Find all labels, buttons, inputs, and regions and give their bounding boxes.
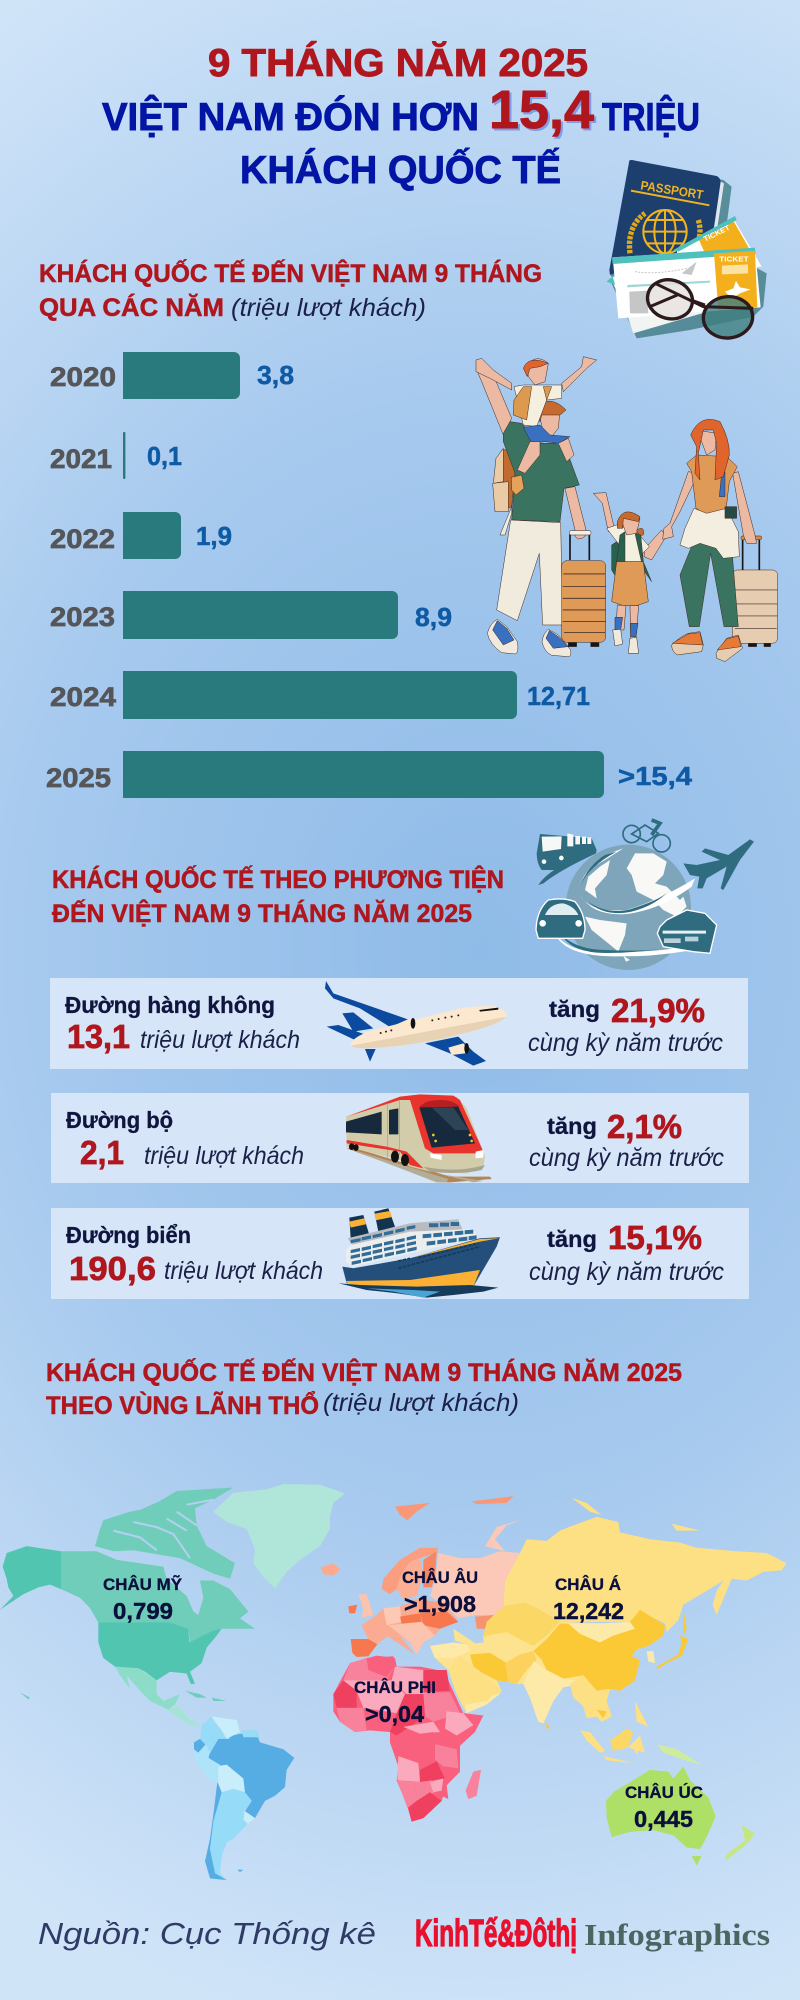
map: Americas xyxy=(0,1484,345,1880)
icon: passport, tickets and glasses xyxy=(607,160,767,340)
bar 2024: 12,71 xyxy=(527,681,590,711)
mother xyxy=(663,419,778,662)
heading: visitors by region xyxy=(46,1357,682,1420)
North America xyxy=(0,1484,345,1725)
heading: visitors by region: KHÁCH QUỐC TẾ ĐẾN VIỆT NAM 9 THÁNG NĂM 2025 xyxy=(46,1357,682,1387)
bar 2020: 2020 xyxy=(50,362,116,392)
panel: road: tăng xyxy=(547,1113,597,1139)
illustration: travelling family xyxy=(476,357,778,662)
title: 15,4 xyxy=(489,80,594,140)
panel: sea: 15,1% xyxy=(608,1219,702,1256)
icon: passport, tickets and glasses: TICKET xyxy=(719,255,749,264)
girl xyxy=(593,493,666,653)
logo: Infographics xyxy=(584,1917,770,1952)
heading: visitors by year xyxy=(39,258,542,322)
Europe xyxy=(321,1496,522,1657)
Asia xyxy=(430,1498,787,1763)
label: Europe: >1,908 xyxy=(404,1591,476,1617)
icon: cruise ship xyxy=(338,1208,500,1298)
label: Africa: >0,04 xyxy=(365,1701,424,1727)
bar 2024: 2024 xyxy=(50,682,116,712)
South America xyxy=(194,1717,294,1880)
icon: airplane xyxy=(325,981,507,1066)
panel: road: Đường bộ xyxy=(66,1107,173,1133)
world map xyxy=(0,1484,787,1880)
heading: visitors by region: THEO VÙNG LÃNH THỔ xyxy=(46,1390,319,1420)
label: Asia: CHÂU Á xyxy=(555,1575,621,1594)
plane xyxy=(683,839,754,890)
logo: KinhTế&Đôthị xyxy=(415,1913,577,1955)
bar 2020: 3,8 xyxy=(257,360,294,390)
panel: air: tăng xyxy=(549,996,600,1022)
label: Africa xyxy=(354,1678,436,1727)
panel: sea: tăng xyxy=(547,1226,597,1252)
bar 2025 xyxy=(46,751,693,798)
panel: air: 21,9% xyxy=(611,992,705,1029)
icon: train xyxy=(346,1094,492,1182)
bar 2025: 2025 xyxy=(46,763,111,793)
panel: road: cùng kỳ năm trước xyxy=(529,1144,724,1172)
label: Europe xyxy=(402,1568,478,1617)
heading: visitors by region: (triệu lượt khách) xyxy=(323,1389,519,1417)
bar 2020 xyxy=(50,352,294,399)
panel: air: cùng kỳ năm trước xyxy=(528,1029,723,1057)
label: Americas: 0,799 xyxy=(113,1598,173,1624)
panel: sea: cùng kỳ năm trước xyxy=(529,1258,724,1286)
heading: visitors by transport xyxy=(52,864,504,928)
bar 2022 xyxy=(50,512,232,559)
title: KHÁCH QUỐC TẾ xyxy=(240,147,561,192)
panel: road: triệu lượt khách xyxy=(144,1142,304,1170)
label: Americas: CHÂU MỸ xyxy=(103,1574,183,1594)
label: Oceania: 0,445 xyxy=(634,1806,693,1832)
label: Oceania xyxy=(625,1783,703,1832)
panel: sea xyxy=(51,1208,749,1299)
bar 2023: 8,9 xyxy=(415,602,452,632)
father's orange suitcase xyxy=(562,531,606,647)
father xyxy=(476,359,586,657)
bar 2023: 2023 xyxy=(50,602,115,632)
map: Europe, Africa, Asia, Oceania xyxy=(321,1496,787,1866)
icon: passport, tickets and glasses: PASSPORT xyxy=(640,178,705,202)
panel: sea: Đường biển xyxy=(66,1222,191,1248)
train xyxy=(537,833,597,885)
bar 2021: 2021 xyxy=(50,444,112,474)
child on shoulders xyxy=(476,357,597,495)
bicycle xyxy=(623,820,670,852)
car xyxy=(536,899,585,938)
title: 9 THÁNG NĂM 2025 xyxy=(208,41,588,85)
panel: air: 13,1 xyxy=(67,1018,130,1055)
icon: globe with transport modes xyxy=(536,820,754,970)
label: Oceania: CHÂU ÚC xyxy=(625,1783,703,1802)
Oceania xyxy=(606,1744,755,1866)
panel: air xyxy=(50,978,748,1069)
ship xyxy=(657,910,717,953)
label: Africa: CHÂU PHI xyxy=(354,1678,436,1697)
heading: visitors by transport: ĐẾN VIỆT NAM 9 THÁNG NĂM 2025 xyxy=(52,898,472,928)
title: TRIỆU xyxy=(602,95,700,139)
heading: visitors by year: KHÁCH QUỐC TẾ ĐẾN VIỆT NAM 9 THÁNG xyxy=(39,258,542,288)
panel: air: triệu lượt khách xyxy=(140,1026,300,1054)
title: 15,4 xyxy=(491,82,596,142)
label: Asia: 12,242 xyxy=(553,1598,624,1624)
panel: sea: 190,6 xyxy=(69,1250,156,1287)
bar 2022: 1,9 xyxy=(196,521,232,551)
bar 2023 xyxy=(50,591,452,639)
title: VIỆT NAM ĐÓN HƠN xyxy=(102,95,479,139)
label: Europe: CHÂU ÂU xyxy=(402,1568,478,1587)
title xyxy=(102,41,700,192)
label: Americas xyxy=(103,1574,183,1624)
bar chart: visitors by year xyxy=(46,352,693,798)
panel: sea: triệu lượt khách xyxy=(164,1257,323,1285)
label: Asia xyxy=(553,1575,624,1624)
bar 2025: >15,4 xyxy=(618,761,693,791)
panel: road: 2,1 xyxy=(80,1134,124,1171)
source note: Nguồn: Cục Thống kê xyxy=(38,1916,376,1951)
bar 2022: 2022 xyxy=(50,524,115,554)
bar 2024 xyxy=(50,671,590,719)
icon: passport, tickets and glasses: TICKET xyxy=(702,223,732,243)
heading: visitors by year: QUA CÁC NĂM xyxy=(39,293,224,322)
heading: visitors by transport: KHÁCH QUỐC TẾ THEO PHƯƠNG TIỆN xyxy=(52,864,504,894)
panel: air: Đường hàng không xyxy=(65,992,275,1018)
panel: road: 2,1% xyxy=(607,1108,682,1145)
bar 2021 xyxy=(50,432,182,479)
Africa xyxy=(333,1656,483,1822)
bar 2021: 0,1 xyxy=(147,441,182,471)
panel: road xyxy=(51,1093,749,1183)
heading: visitors by year: (triệu lượt khách) xyxy=(231,294,426,322)
